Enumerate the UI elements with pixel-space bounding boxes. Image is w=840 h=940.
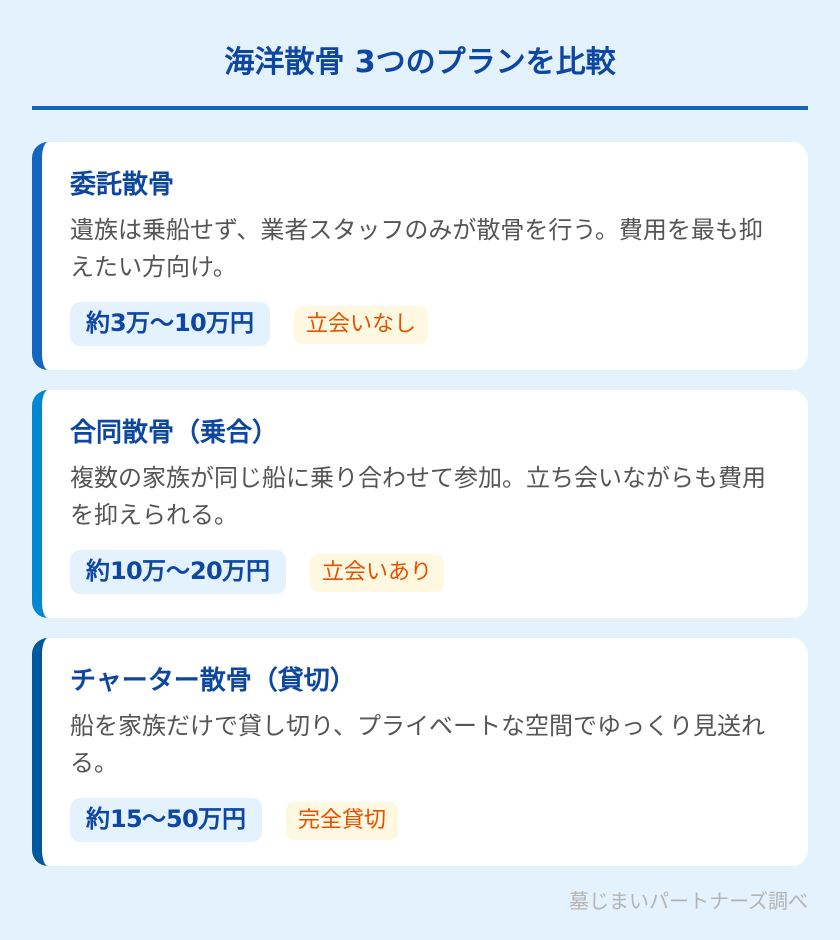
tag: 立会いなし [306, 312, 416, 337]
panel: チャーター散骨 [32, 638, 808, 866]
price badge: 約3万〜10万円 [86, 309, 254, 337]
tag: 立会いあり [322, 560, 432, 585]
price badge: 約15〜50万円 [86, 805, 246, 833]
description: 船を家族だけで貸し切り、プライベートな空間でゆっくり見送れる。 [70, 712, 765, 777]
tag [310, 554, 444, 592]
tag: 完全貸切 [298, 808, 386, 833]
source note: 墓じまいパートナーズ調べ [569, 889, 808, 913]
title: 海洋散骨 3つのプランを比較 [224, 45, 616, 80]
tag [286, 802, 398, 840]
description: 複数の家族が同じ船に乗り合わせて参加。立ち会いながらも費用を抑えられる。 [70, 464, 766, 529]
description: 遺族は乗船せず、業者スタッフのみが散骨を行う。費用を最も抑えたい方向け。 [70, 216, 763, 281]
tag [294, 306, 428, 344]
panel: 委託散骨 [32, 142, 808, 370]
price badge [70, 798, 262, 842]
heading: 委託散骨 [70, 170, 174, 200]
price badge: 約10万〜20万円 [86, 557, 270, 585]
price badge [70, 302, 270, 346]
heading: チャーター散骨（貸切） [70, 666, 356, 696]
panel: 合同散骨 [32, 390, 808, 618]
heading: 合同散骨（乗合） [70, 418, 278, 448]
price badge [70, 550, 286, 594]
